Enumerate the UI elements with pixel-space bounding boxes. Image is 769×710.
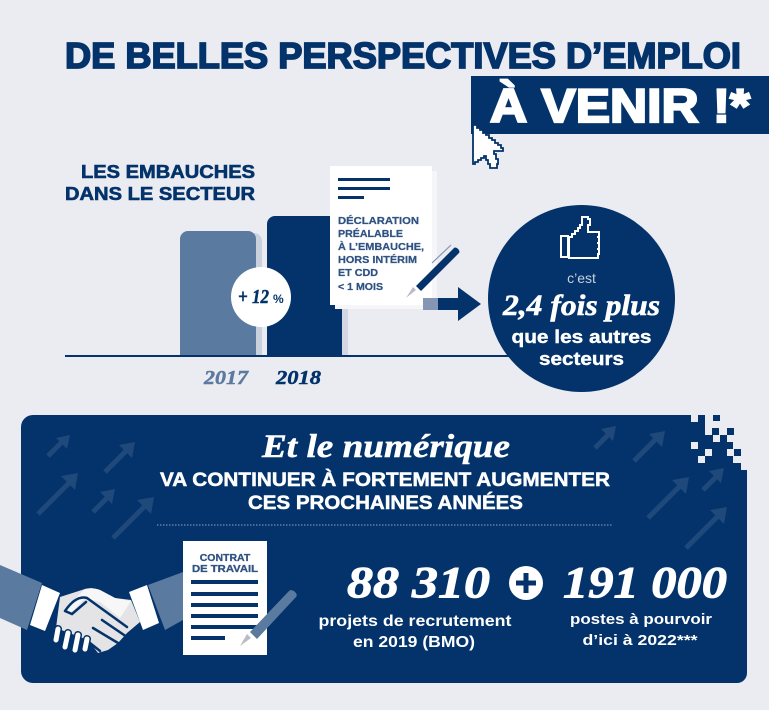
callout: +12 % [231, 267, 291, 327]
stat: 191 000: postes à pourvoir [570, 611, 712, 628]
bar chart: embauches 2017-2018: 2018 [275, 367, 321, 389]
stat: 88 310: projets de recrutement [318, 613, 512, 630]
document: déclaration préalable: PRÉALABLE [338, 227, 403, 240]
stat: 191 000: 191 000 [563, 558, 727, 607]
heading: les embauches: DANS LE SECTEUR [65, 184, 255, 204]
document: déclaration préalable: À L’EMBAUCHE, [338, 240, 424, 253]
panel: 2,4 fois plus: secteurs [539, 349, 624, 369]
document: contrat de travail [183, 541, 267, 655]
banner: à venir: À VENIR !* [490, 79, 751, 132]
icon: plus [509, 566, 543, 600]
stat: 88 310: en 2019 (BMO) [353, 634, 475, 651]
document: contrat de travail: CONTRAT [200, 552, 251, 564]
bar chart: embauches 2017-2018: 2017 [203, 367, 249, 389]
document: déclaration préalable: < 1 MOIS [338, 281, 383, 293]
icon: handshake [0, 565, 183, 653]
pixel squares [691, 415, 734, 463]
bar chart: embauches 2017-2018 [65, 216, 510, 389]
panel: 2,4 fois plus [488, 205, 675, 392]
icon: pen [406, 245, 459, 298]
icon: pixel thumbs up [561, 217, 599, 258]
subheading: VA CONTINUER À FORTEMENT AUGMENTER [160, 469, 610, 491]
icon: contract pen [240, 590, 297, 646]
stat: 191 000 [563, 558, 727, 649]
background arrows [38, 426, 727, 548]
document: déclaration préalable: HORS INTÉRIM [338, 253, 417, 266]
heading: les embauches: LES EMBAUCHES [81, 162, 255, 182]
panel: et le numérique [0, 415, 747, 683]
callout: +12 %: % [273, 292, 284, 306]
document: déclaration préalable: ET CDD [338, 267, 378, 279]
title: DE BELLES PERSPECTIVES D’EMPLOI [65, 35, 741, 76]
heading: et le numérique: Et le numérique [261, 429, 510, 465]
stat: 88 310: 88 310 [347, 558, 490, 607]
heading: les embauches [65, 162, 255, 204]
arrow [423, 287, 481, 321]
panel: 2,4 fois plus: 2,4 fois plus [502, 289, 660, 322]
subheading: CES PROCHAINES ANNÉES [248, 492, 523, 514]
document: déclaration préalable: DÉCLARATION [338, 214, 419, 227]
stat: 191 000: d’ici à 2022*** [582, 632, 698, 649]
stat: 88 310 [318, 558, 512, 651]
document: contrat de travail: DE TRAVAIL [192, 563, 259, 575]
subheading [160, 469, 610, 514]
panel: 2,4 fois plus: c’est [567, 270, 596, 286]
icon: pixel cursor [473, 123, 503, 168]
panel: 2,4 fois plus: que les autres [512, 327, 652, 347]
document: déclaration préalable [330, 166, 437, 309]
callout: +12 %: + 12 [238, 286, 269, 308]
